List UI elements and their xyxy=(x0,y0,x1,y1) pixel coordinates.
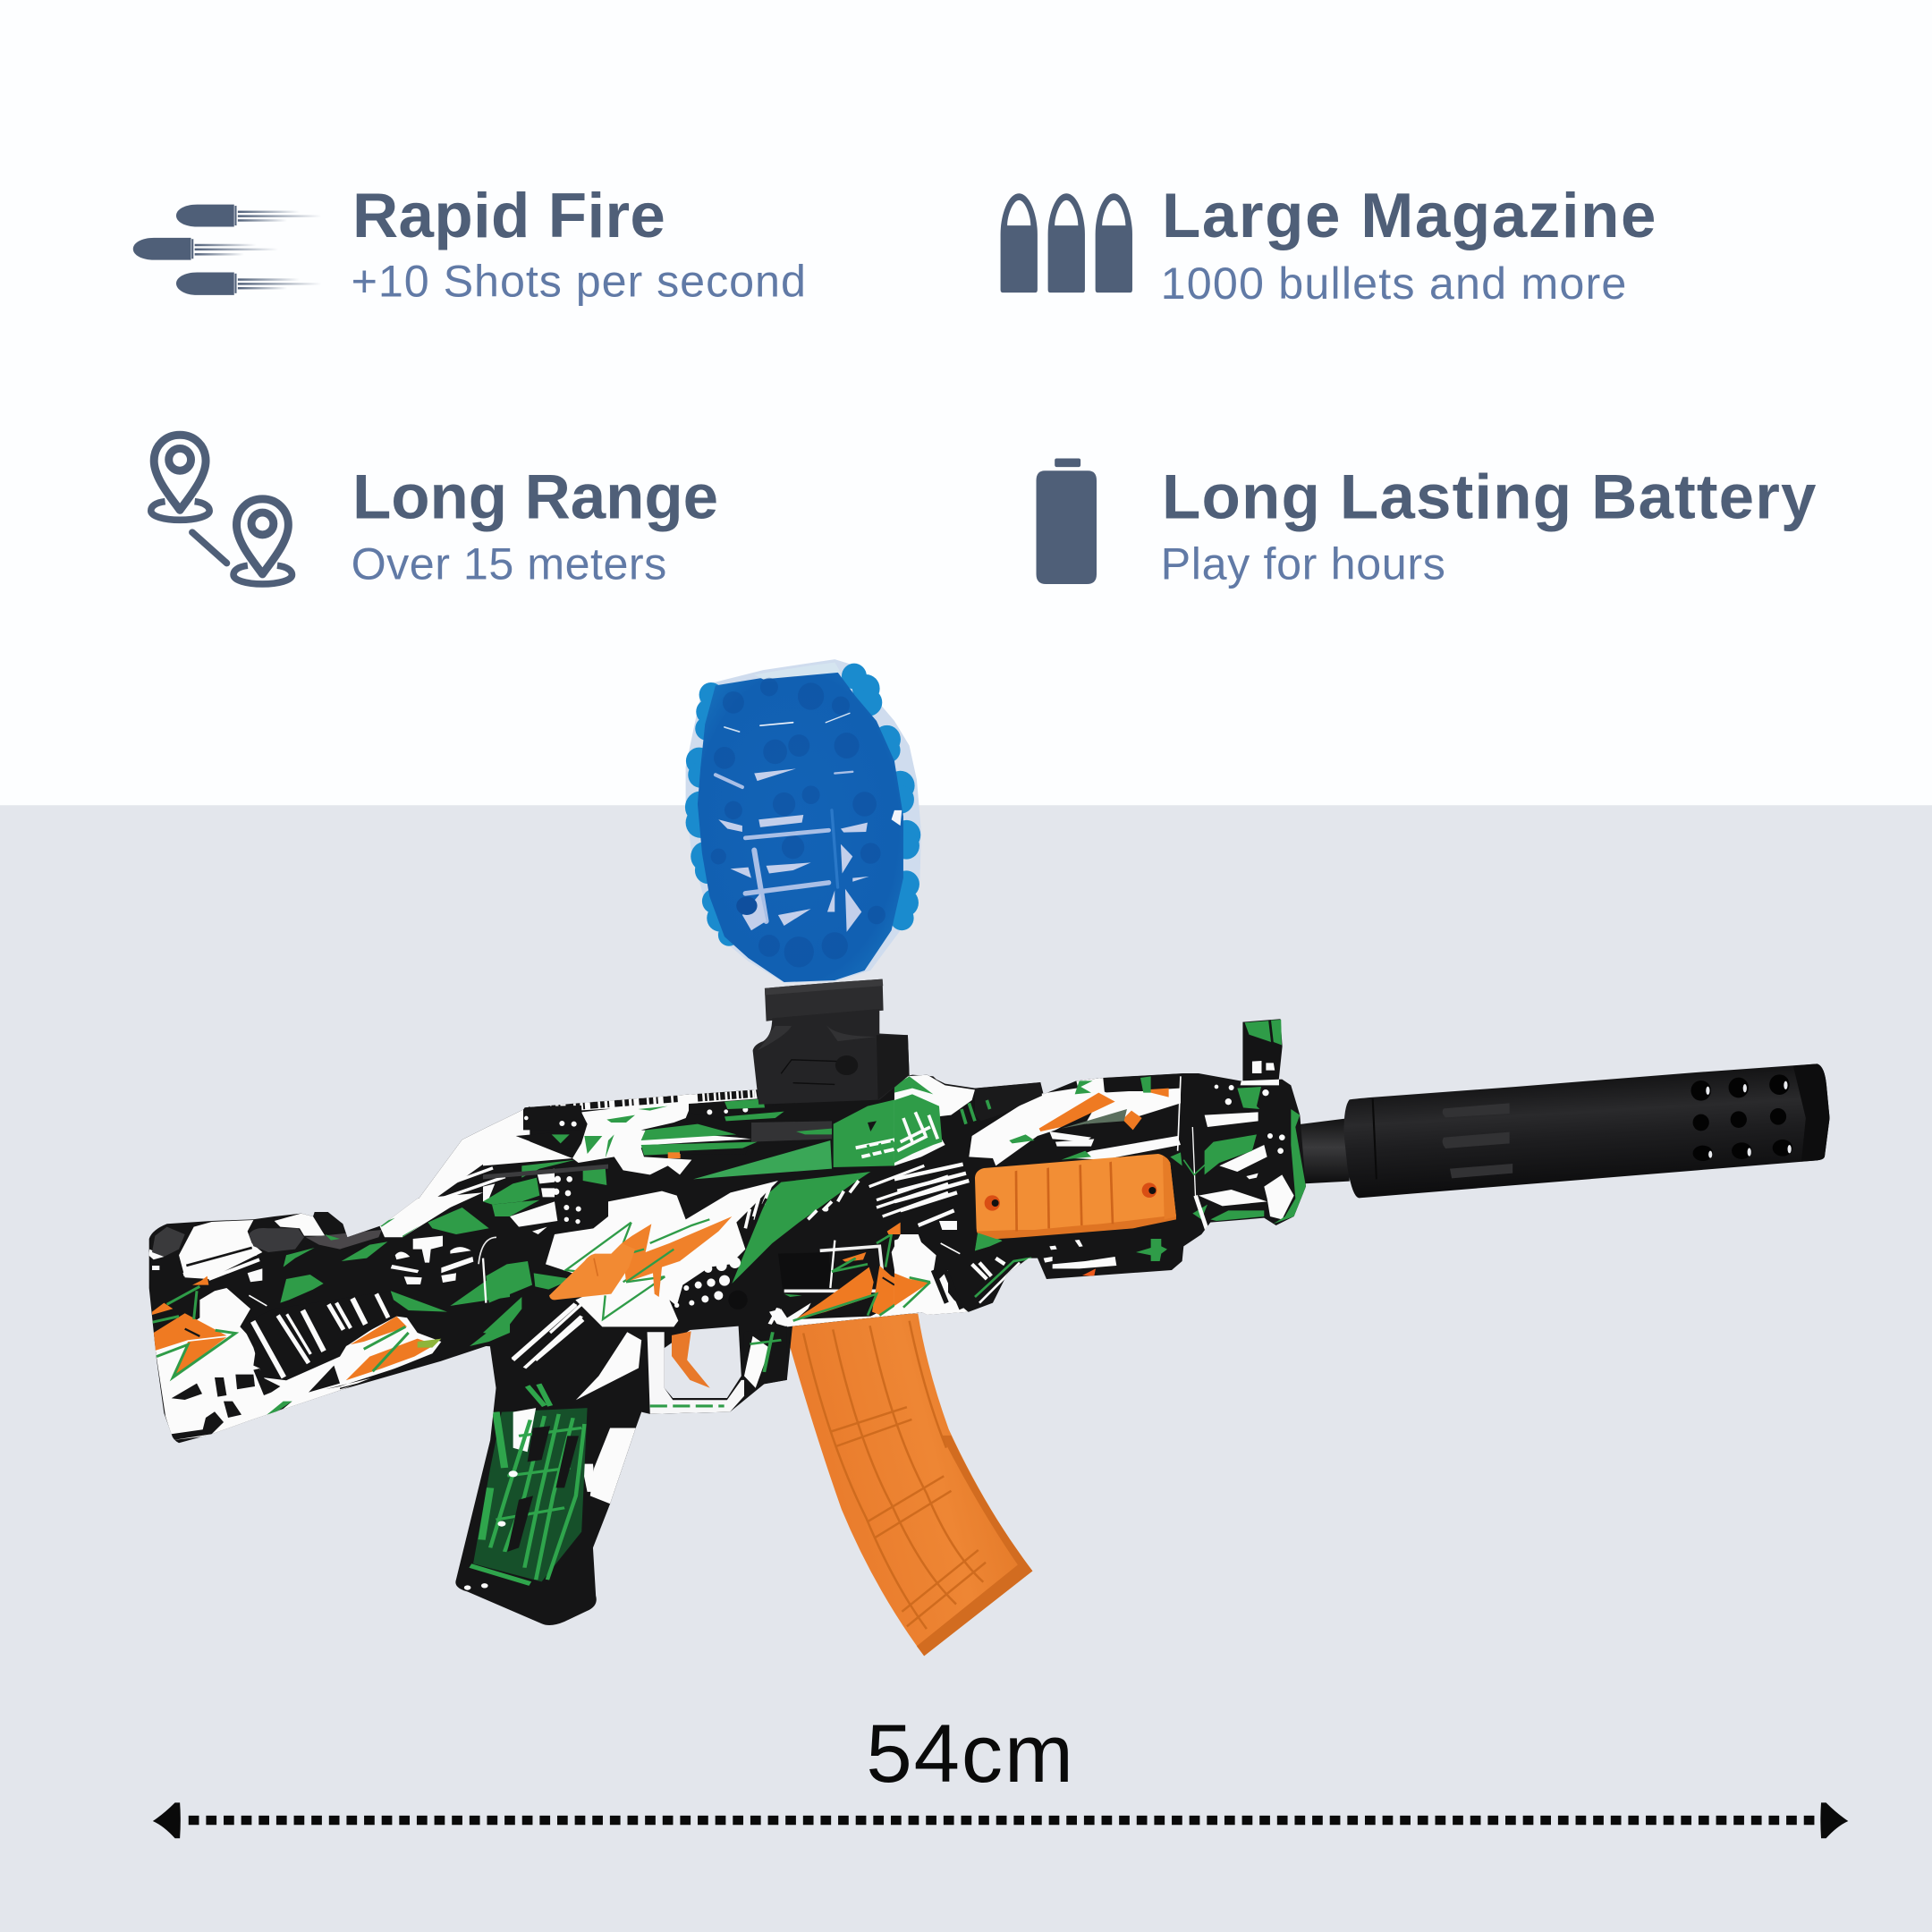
green receiver patches xyxy=(483,1076,942,1335)
barcode block xyxy=(242,1324,372,1381)
text: shots per second: +10 Shots per second xyxy=(352,255,806,306)
heading: rapid fire: Rapid Fire xyxy=(352,181,665,251)
black chunk top xyxy=(975,1082,1042,1106)
background: upper white area xyxy=(0,0,1932,806)
jagged edge marks xyxy=(745,1181,859,1228)
trigger xyxy=(672,1331,710,1388)
text: play for hours: Play for hours xyxy=(1161,538,1445,589)
hopper adapter block xyxy=(753,1009,910,1105)
orange streaks xyxy=(1039,1089,1169,1131)
icon: three bullets xyxy=(1001,193,1132,292)
thin vertical lines xyxy=(1178,1076,1181,1151)
feature: long range xyxy=(151,435,718,589)
dots on receiver xyxy=(674,1257,741,1308)
lower orange graphic xyxy=(796,1252,894,1318)
magazine xyxy=(784,1313,1032,1656)
feature: rapid fire xyxy=(133,181,806,306)
thin green outline star xyxy=(566,1219,709,1319)
handle and orange splash xyxy=(622,1216,732,1297)
green spatter xyxy=(894,1076,1306,1266)
darker gel clusters xyxy=(711,678,886,968)
under-rail marks xyxy=(1044,1240,1116,1268)
shoulder wedge camo xyxy=(419,1106,530,1199)
gel body xyxy=(698,673,903,982)
outer gel bumps xyxy=(685,664,920,946)
background: lower grey area xyxy=(0,805,1932,1932)
green mesh bars xyxy=(855,1138,894,1159)
icon: flying bullets xyxy=(133,205,322,295)
orange dot and slot xyxy=(668,1152,681,1158)
stock camo xyxy=(148,1192,510,1440)
heading: large magazine: Large Magazine xyxy=(1162,181,1656,251)
length label: 54cm xyxy=(866,1707,1073,1800)
helmet graphic xyxy=(391,1236,473,1284)
heading: long lasting battery: Long Lasting Battery xyxy=(1162,462,1817,532)
trigger guard opening xyxy=(665,1326,741,1398)
orange rail xyxy=(975,1154,1176,1240)
icon: map pins xyxy=(151,435,292,584)
black text-like marks on top rail xyxy=(552,1098,680,1108)
text: bullets: 1000 bullets and more xyxy=(1161,258,1626,309)
feature: large magazine xyxy=(1001,181,1656,309)
feature: long lasting battery xyxy=(1037,458,1817,589)
text: over 15 meters: Over 15 meters xyxy=(352,538,666,589)
orange butt graphic xyxy=(152,1276,436,1380)
green patches xyxy=(267,1208,510,1415)
black and white stripes xyxy=(894,1165,1004,1279)
black flecks on butt xyxy=(172,1353,441,1440)
receiver camo xyxy=(483,1076,948,1360)
fringe of clear shell xyxy=(686,659,921,983)
dimension arrow xyxy=(153,1802,1848,1838)
heading: long range: Long Range xyxy=(352,462,718,532)
gloss bar xyxy=(483,1165,608,1179)
product: gel blaster xyxy=(123,659,1830,1656)
gel ball hopper xyxy=(685,659,921,1105)
vent holes xyxy=(1690,1074,1792,1161)
hopper collar xyxy=(765,979,884,1021)
pale window patches xyxy=(718,768,902,932)
handguard camo xyxy=(894,1072,1306,1316)
mag catch frame xyxy=(778,1252,832,1290)
front sight xyxy=(1242,1019,1283,1082)
gun body with camo xyxy=(148,1073,1306,1625)
lattice highlights xyxy=(716,713,852,921)
right stripes xyxy=(869,1165,948,1216)
icon: battery xyxy=(1037,458,1097,584)
suppressor barrel xyxy=(1290,1063,1830,1198)
diagonal white lines xyxy=(513,1304,583,1360)
grip and trigger camo xyxy=(464,1304,787,1590)
suppressor ribs xyxy=(1443,1103,1513,1178)
